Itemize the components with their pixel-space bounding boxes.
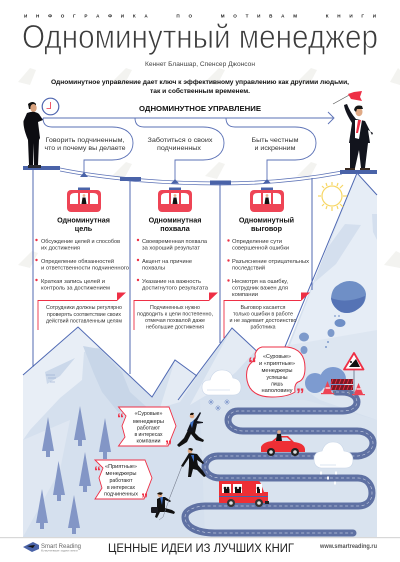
figure: climbing manager (170, 448, 206, 497)
callout: pleasant managers: в интересах (107, 485, 135, 491)
cloud with snow (202, 370, 241, 411)
footer logo (23, 542, 81, 552)
three principles: и искренним (254, 145, 296, 152)
column 1: goal: контроль за достижением (41, 286, 110, 292)
callout: pleasant managers: работают (110, 478, 133, 484)
callout: harsh managers: в интересах (134, 432, 163, 438)
boulders (299, 281, 366, 354)
callout: harsh managers: компании (136, 438, 160, 444)
column 1: goal: и ответственности подчиненного (41, 266, 129, 272)
icon: sun (318, 182, 347, 211)
gondola 2 (158, 188, 192, 212)
icon: clock (42, 98, 59, 115)
cable rails and platforms (23, 166, 377, 185)
column 3: reprimand: Разъяснение отрицательных (232, 259, 309, 265)
column 3: reprimand: Одноминутный (239, 216, 294, 224)
callout: partial success bubble: ” (296, 385, 304, 404)
column 3: reprimand (224, 216, 310, 338)
callout: pleasant managers: «Приятные» (105, 464, 137, 470)
column 2: praise: отмечая похвалой даже (145, 317, 205, 324)
three principles: подчиненных (157, 145, 202, 152)
column 2: praise: небольшие достижения (146, 324, 204, 330)
three principles: Говорить подчиненным, (46, 137, 125, 144)
column 1: goal: цель (75, 224, 93, 233)
callout: partial success bubble: “ (248, 354, 256, 373)
column 3: reprimand: сотрудник важен для (232, 286, 288, 292)
column 1: goal: Обсуждение целей и способов (41, 238, 120, 245)
callout: harsh managers: “ (117, 410, 124, 426)
callout: pleasant managers: менеджеры (106, 471, 137, 477)
icon: rockfall warning sign (344, 353, 364, 394)
callout: partial success bubble: успешны (266, 375, 288, 381)
three principles: Быть честным (252, 137, 298, 144)
column 1: goal: Одноминутная (57, 216, 110, 224)
column 3: reprimand: Определение сути (232, 239, 282, 245)
footer website: www.smartreading.ru (319, 544, 377, 550)
column 2: praise: достигнутого результата (142, 286, 209, 292)
fir trees (36, 406, 111, 534)
callout: partial success bubble: наполовину (262, 388, 293, 394)
column 3: reprimand: Несмотря на ошибку, (232, 279, 288, 285)
callout: harsh managers: ” (165, 437, 172, 453)
column lines (33, 170, 312, 374)
column 1: goal: их достижения (41, 246, 80, 252)
column 2: praise: за хороший результат (142, 244, 200, 252)
mountains background (23, 173, 377, 537)
column 1: goal: действий поставленным целям (46, 318, 122, 324)
column 1: goal: проверять соответствие своих (47, 312, 121, 318)
callout: partial success bubble: лишь (271, 382, 283, 388)
header kicker: И Н Ф О Г Р А Ф И К А П О М О Т И В А М К Н И Г И (24, 14, 376, 18)
column 1: goal: Определение обязанностей (41, 258, 114, 265)
column 3: reprimand: компании (232, 292, 258, 298)
callout: harsh managers: работают (137, 426, 160, 432)
gondola 1 (67, 188, 101, 212)
callout: partial success bubble (247, 347, 305, 404)
figure: thinking manager (23, 102, 43, 168)
footer logo: Ключевые идеи книг (41, 548, 78, 552)
column 1: goal: Сотрудники должны регулярно (46, 305, 122, 311)
column 3: reprimand: только ошибки в работе (233, 312, 293, 318)
figure: manager with suitcase on rope (151, 492, 175, 520)
column 2: praise: подводить к цели постепенно, (137, 312, 213, 318)
icon: red car (261, 430, 305, 456)
road works: barrier and cones (321, 379, 365, 395)
callout: pleasant managers: ” (141, 490, 148, 506)
column 3: reprimand: работника (250, 324, 276, 330)
column 2: praise: Одноминутная (149, 216, 201, 224)
footer logo: Smart Reading (41, 543, 81, 550)
column 2: praise: Своевременная похвала (142, 239, 208, 245)
callout: partial success bubble: и «приятные» (259, 361, 295, 367)
heading: one minute management: ОДНОМИНУТНОЕ УПРАВЛЕНИЕ (139, 104, 261, 113)
bushes (305, 367, 346, 393)
three principles: что и почему вы делаете (44, 145, 126, 152)
intro text: Одноминутное управление дает ключ к эффективному управлению как другими людьми, (51, 79, 349, 86)
column 2: praise: похвалы (142, 266, 165, 272)
footer divider (0, 537, 400, 538)
callout: harsh managers: менеджеры (133, 419, 164, 425)
column 3: reprimand: и не задевает достоинство (230, 318, 296, 324)
figure: manager with flag (333, 91, 373, 170)
column 3: reprimand: Выговор касается (240, 305, 286, 311)
authors: Кеннет Бланшар, Спенсер Джонсон (145, 62, 255, 68)
footer slogan: ЦЕННЫЕ ИДЕИ ИЗ ЛУЧШИХ КНИГ (108, 543, 295, 555)
column 2: praise: похвала (160, 224, 191, 233)
icon: red bus (219, 481, 269, 507)
callout: pleasant managers: “ (94, 463, 101, 479)
column 2: praise: Подчиненных нужно (150, 305, 200, 311)
gondola 3 (250, 188, 284, 212)
column 3: reprimand: выговор (251, 224, 283, 233)
three principles: Заботиться о своих (148, 136, 213, 144)
callout: partial success bubble: «Суровые» (263, 354, 291, 360)
column 2: praise: Акцент на причине (142, 259, 192, 265)
column 1: goal (35, 216, 129, 330)
cloud with rain (314, 442, 353, 485)
wind marks (46, 375, 56, 382)
intro text: так и собственным временем. (150, 88, 250, 95)
callout: pleasant managers (94, 460, 152, 506)
three principles (44, 136, 298, 152)
road (185, 392, 373, 533)
column 3: reprimand: последствий (232, 264, 265, 272)
column 3: reprimand: совершенной ошибки (232, 244, 289, 252)
connector arrow with branches (43, 112, 334, 180)
column 2: praise: Указание на важность (142, 279, 201, 285)
intro text (51, 79, 349, 95)
column 1: goal: Краткая запись целей и (41, 278, 105, 285)
callout: harsh managers (117, 407, 176, 453)
callout: partial success bubble: менеджеры (262, 368, 293, 374)
callout: harsh managers: «Суровые» (134, 411, 162, 417)
figure: running manager (177, 412, 204, 447)
callout: pleasant managers: подчиненных (104, 492, 138, 498)
mountain outline (23, 173, 377, 400)
column 2: praise (134, 216, 218, 330)
